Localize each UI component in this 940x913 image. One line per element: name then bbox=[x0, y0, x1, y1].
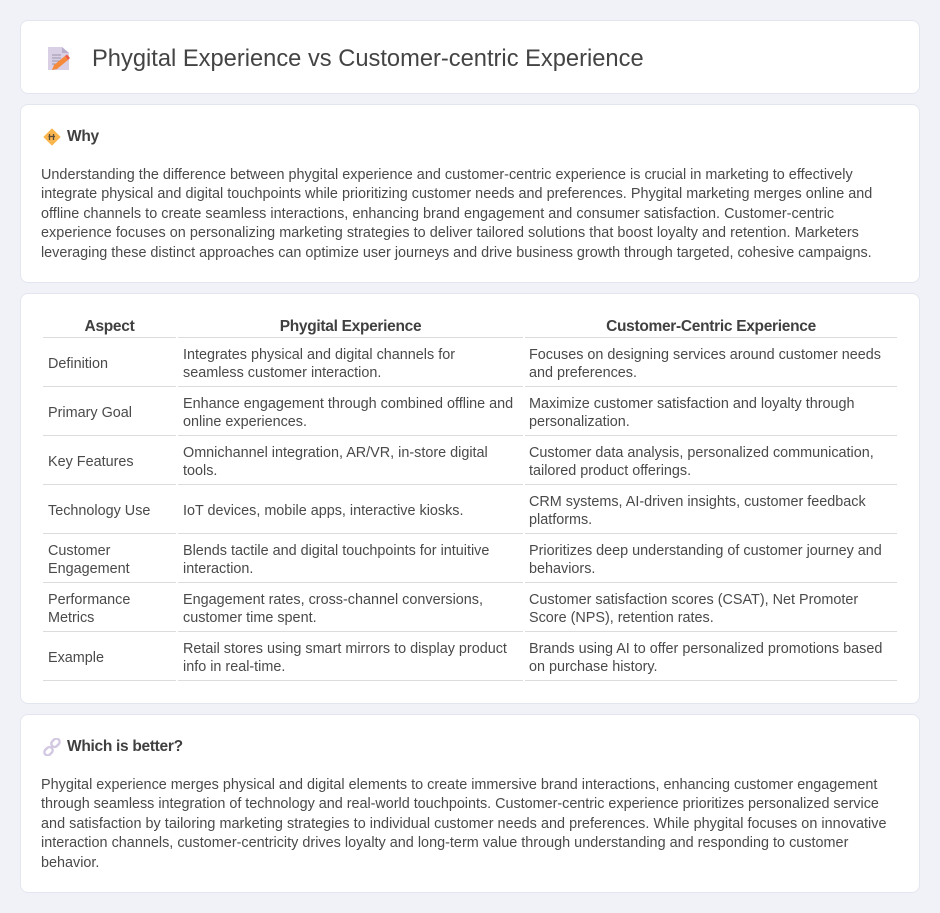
row: definition: Focuses on designing services around customer needs bbox=[529, 347, 881, 363]
row: primary goal: Enhance engagement through combined offline and bbox=[183, 396, 513, 412]
text block: why paragraph: leveraging these distinct approaches can optimize user journeys and drive business growth through targeted, cohesive campaigns. bbox=[41, 245, 872, 261]
row: example bbox=[48, 641, 882, 675]
text block: why paragraph: Understanding the difference between phygital experience and customer-centric experience is crucial in marketing to effectively bbox=[41, 167, 853, 183]
row: primary goal: Maximize customer satisfaction and loyalty through bbox=[529, 396, 855, 412]
row: performance metrics: Score (NPS), retention rates. bbox=[529, 610, 714, 626]
row: technology use: Technology Use bbox=[48, 503, 150, 519]
text block: which is better paragraph bbox=[41, 777, 887, 871]
row: definition bbox=[48, 347, 881, 381]
row: definition: and preferences. bbox=[529, 365, 637, 381]
row: customer engagement: Prioritizes deep understanding of customer journey and bbox=[529, 543, 882, 559]
row: performance metrics: customer time spent. bbox=[183, 610, 317, 626]
row: customer engagement: Engagement bbox=[48, 561, 130, 577]
row: technology use: platforms. bbox=[529, 512, 592, 528]
text block: which is better paragraph: behavior. bbox=[41, 855, 99, 871]
row: key features: Omnichannel integration, AR/VR, in-store digital bbox=[183, 445, 488, 461]
row: key features: Key Features bbox=[48, 454, 134, 470]
row: customer engagement: Customer bbox=[48, 543, 110, 559]
text block: why paragraph bbox=[41, 167, 872, 261]
heading: which is better: Which is better? bbox=[67, 738, 183, 755]
panel: why bbox=[20, 104, 920, 283]
row: primary goal: personalization. bbox=[529, 414, 630, 430]
text block: why paragraph: experience focuses on personalizing marketing strategies to deliver tailored solutions that boost loyalty and retention. Marketers bbox=[41, 225, 859, 241]
row: key features: tools. bbox=[183, 463, 217, 479]
panel: which is better bbox=[20, 714, 920, 893]
row: key features: Customer data analysis, personalized communication, bbox=[529, 445, 874, 461]
text block: why paragraph: offline channels to create seamless interactions, enhancing brand engagement and consumer satisfaction. Customer-centric bbox=[41, 206, 834, 222]
panel: comparison table bbox=[20, 293, 920, 704]
row: customer engagement: Blends tactile and digital touchpoints for intuitive bbox=[183, 543, 489, 559]
row: customer engagement: interaction. bbox=[183, 561, 253, 577]
title: Phygital Experience vs Customer-centric Experience bbox=[92, 46, 644, 72]
heading: why: Why bbox=[67, 128, 99, 145]
row: performance metrics: Performance bbox=[48, 592, 130, 608]
row: technology use: CRM systems, AI-driven insights, customer feedback bbox=[529, 494, 866, 510]
row: customer engagement: behaviors. bbox=[529, 561, 595, 577]
row: key features bbox=[48, 445, 874, 479]
row: performance metrics bbox=[48, 592, 858, 626]
row: customer engagement bbox=[48, 543, 882, 577]
table header bbox=[84, 318, 816, 335]
row: technology use bbox=[48, 494, 866, 528]
row: definition: Definition bbox=[48, 356, 108, 372]
row: example: Example bbox=[48, 650, 104, 666]
text block: which is better paragraph: and satisfaction by tailoring marketing strategies to individual customer needs and preferences. While phygital focuses on innovative bbox=[41, 816, 887, 832]
text block: which is better paragraph: interaction channels, customer-centricity drives loyalty and long-term value through understanding and responding to customer bbox=[41, 835, 848, 851]
text block: why paragraph: integrate physical and digital touchpoints while prioritizing customer needs and preferences. Phygital marketing merges online and bbox=[41, 186, 872, 202]
row: performance metrics: Customer satisfaction scores (CSAT), Net Promoter bbox=[529, 592, 858, 608]
row: primary goal: online experiences. bbox=[183, 414, 307, 430]
row: example: on purchase history. bbox=[529, 659, 658, 675]
table header: Aspect bbox=[85, 318, 134, 335]
row: definition: seamless customer interaction. bbox=[183, 365, 381, 381]
row: primary goal bbox=[48, 396, 855, 430]
table header: Phygital Experience bbox=[280, 318, 421, 335]
row: technology use: IoT devices, mobile apps, interactive kiosks. bbox=[183, 503, 463, 519]
icon: link bbox=[43, 738, 61, 756]
table header: Customer-Centric Experience bbox=[606, 318, 816, 335]
row: key features: tailored product offerings. bbox=[529, 463, 691, 479]
icon: diamond sign bbox=[44, 128, 60, 146]
row: example: info in real-time. bbox=[183, 659, 285, 675]
row: performance metrics: Metrics bbox=[48, 610, 94, 626]
row: example: Retail stores using smart mirrors to display product bbox=[183, 641, 507, 657]
icon: document with pencil bbox=[48, 47, 70, 70]
text block: which is better paragraph: Phygital experience merges physical and digital elements to create immersive brand interactions, enhancing customer engagement bbox=[41, 777, 877, 793]
row: primary goal: Primary Goal bbox=[48, 405, 132, 421]
row: definition: Integrates physical and digital channels for bbox=[183, 347, 455, 363]
text block: which is better paragraph: through seamless integration of technology and real-world touchpoints. Customer-centric experience prioritizes personalized service bbox=[41, 796, 879, 812]
panel: title header bbox=[20, 20, 920, 94]
row: example: Brands using AI to offer personalized promotions based bbox=[529, 641, 882, 657]
row: performance metrics: Engagement rates, cross-channel conversions, bbox=[183, 592, 483, 608]
